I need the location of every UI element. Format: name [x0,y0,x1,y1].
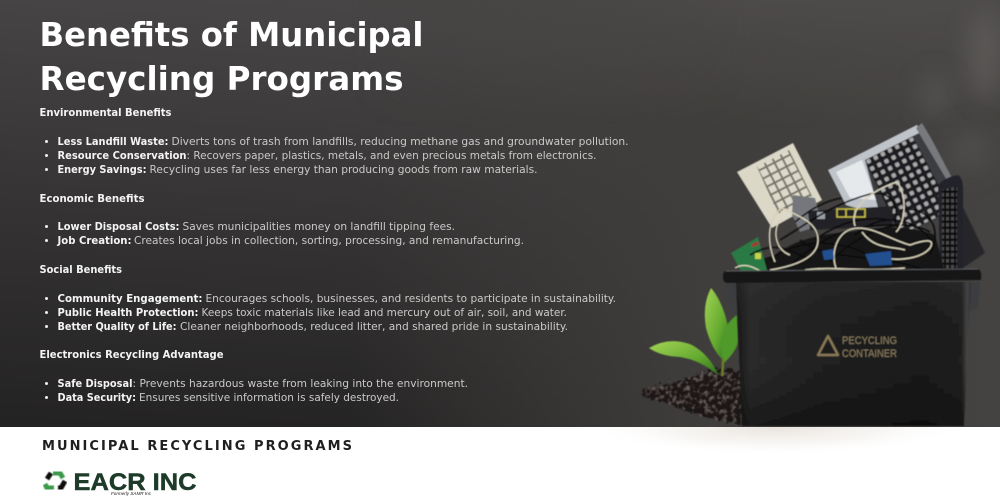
leaf: centre [705,288,729,360]
section: Electronics Recycling Advantage [40,349,468,404]
upright black keyboard [938,175,963,272]
bullet: Lower Disposal Costs [45,221,455,233]
bullet: Lower Disposal Costs: Lower Disposal Costs: [58,221,180,233]
bullet: Resource Conservation: Resource Conservation [58,150,186,162]
bullet: Better Quality of Life: Cleaner neighborhoods, reduced litter, and shared pride in sustainability. [180,321,568,333]
white cables [735,182,932,272]
section: Environmental Benefits [40,107,628,176]
bullet: Less Landfill Waste: Less Landfill Waste: [58,136,168,148]
section: Social Benefits [40,264,616,333]
bullet: Safe Disposal: : Prevents hazardous waste from leaking into the environment. [132,378,468,390]
bullet: Resource Conservation: : Recovers paper, plastics, metals, and even precious metals from electronics. [186,150,596,162]
bullet: Lower Disposal Costs: Saves municipalities money on landfill tipping fees. [182,221,455,233]
bullet: Community Engagement: Community Engagement: [58,293,202,305]
cream keyboard [737,143,822,228]
panel: white footer [0,427,1000,500]
bullet: Data Security: Ensures sensitive information is safely destroyed. [139,392,399,404]
wordmark: EACR INC [74,469,196,496]
title: Benefits of Municipal [40,15,424,54]
bullet: Job Creation: Job Creation: [57,235,132,247]
illustration: recycling bin with e-waste [723,123,985,426]
bullet: Energy Savings: Recycling uses far less energy than producing goods from raw materials. [150,164,538,176]
bullet: Better Quality of Life: Better Quality of Life: [58,321,176,333]
leaf: left [649,341,718,375]
bullet: Data Security: Data Security: [58,392,136,404]
bullet: Safe Disposal: Safe Disposal [58,378,132,390]
black cables [750,193,935,270]
container label: PECYCLING [842,335,897,347]
bin rim [723,269,981,283]
icon: recycling arrows [45,473,65,488]
footer heading: MUNICIPAL RECYCLING PROGRAMS [42,439,352,454]
grey adapter [792,195,822,232]
recycling triangle [818,336,838,355]
logo: EACR INC [45,469,196,496]
illustration: soil and seedling [640,288,745,424]
leaf: right [721,315,738,364]
bullet: Less Landfill Waste: Diverts tons of trash from landfills, reducing methane gas and groundwater pollution. [172,136,628,148]
tagline: Formerly SAMR Inc [111,491,152,496]
heading: Electronics Recycling Advantage: Electronics Recycling Advantage [40,349,224,361]
bin body [736,282,971,426]
title: Recycling Programs [40,59,404,98]
bin handles [726,282,980,313]
title [40,15,424,98]
green circuit board [731,237,767,273]
heading: Environmental Benefits: Environmental Benefits [40,107,172,119]
bin recycling mark [818,335,897,360]
laptop [828,123,985,268]
bullet: Public Health Protection: Public Health Protection: [58,307,198,319]
bin recycling mark: CONTAINER [842,348,897,360]
soil mound [640,368,745,424]
shadow under bin [651,427,900,446]
bullet: Public Health Protection [45,307,567,319]
heading: Social Benefits: Social Benefits [40,264,122,276]
blue connectors [822,249,892,266]
stem [722,358,723,376]
bullet: Energy Savings: Energy Savings: [58,164,146,176]
bullet: Job Creation: Creates local jobs in collection, sorting, processing, and remanufacturing. [134,235,524,247]
router [808,206,893,230]
bullet: Public Health Protection: Keeps toxic materials like lead and mercury out of air, soil, and water. [202,307,567,319]
bullet: Community Engagement: Encourages schools, businesses, and residents to participate in sustainability. [206,293,616,305]
tangled cable mass [738,228,945,272]
section: Economic Benefits [40,193,524,247]
heading: Economic Benefits: Economic Benefits [40,193,144,205]
